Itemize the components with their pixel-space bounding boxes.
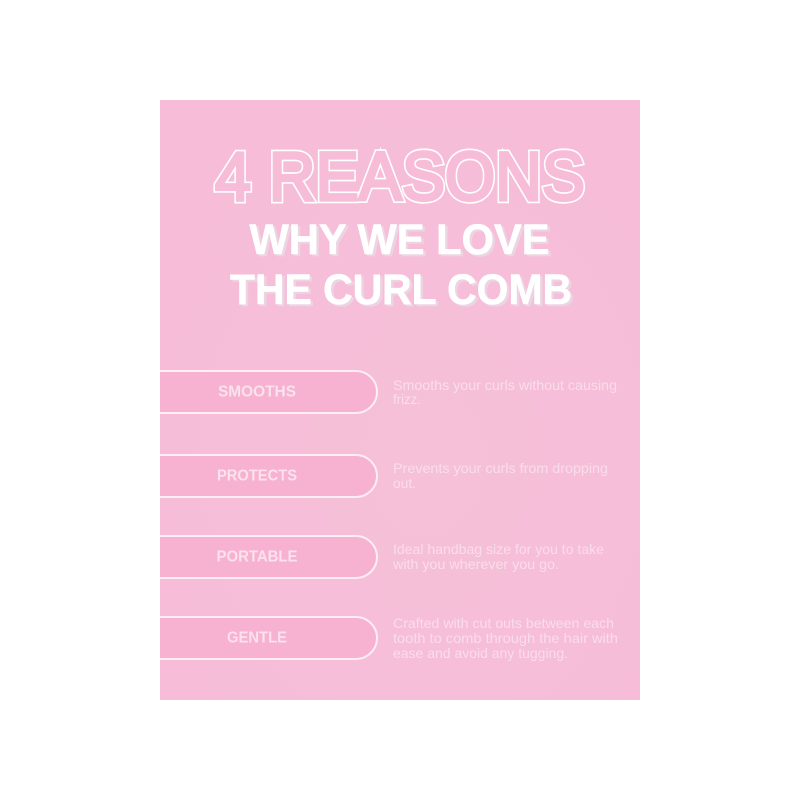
description: smooths: frizz. — [393, 391, 421, 407]
description: protects: out. — [393, 475, 416, 491]
row: smooths — [160, 371, 617, 413]
description: protects — [393, 460, 608, 491]
pill label: smooths — [160, 371, 377, 413]
pill label: portable: PORTABLE — [216, 548, 298, 566]
description: gentle: tooth to comb through the hair with — [393, 630, 618, 646]
title: 4 reasons: 4 REASONS — [215, 138, 585, 215]
pill label: gentle: GENTLE — [227, 630, 287, 646]
pill label: gentle — [160, 617, 377, 659]
heading: why we love: WHY WE LOVE — [250, 216, 550, 264]
panel: pink background — [160, 100, 640, 700]
description: portable — [392, 541, 604, 572]
pill label: protects: PROTECTS — [217, 468, 297, 484]
description: smooths: Smooths your curls without causing — [393, 377, 617, 393]
heading: the curl comb: THE CURL COMB — [230, 266, 572, 314]
description: protects: Prevents your curls from dropping — [393, 460, 608, 476]
description: gentle — [393, 615, 618, 661]
row: portable — [160, 536, 604, 578]
title: 4 reasons: 4 REASONS — [215, 138, 585, 215]
heading: the curl comb: THE CURL COMB — [232, 268, 574, 316]
row: protects — [160, 455, 608, 497]
description: gentle: Crafted with cut outs between each — [393, 615, 614, 631]
pill label: portable — [160, 536, 377, 578]
description: portable: with you wherever you go. — [392, 556, 559, 572]
description: gentle: ease and avoid any tugging. — [393, 645, 568, 661]
description: smooths — [393, 377, 617, 407]
row: gentle — [160, 615, 618, 661]
description: portable: Ideal handbag size for you to take — [393, 541, 604, 557]
pill label: protects — [160, 455, 377, 497]
heading: why we love: WHY WE LOVE — [252, 218, 552, 266]
pill label: smooths: SMOOTHS — [218, 384, 296, 400]
